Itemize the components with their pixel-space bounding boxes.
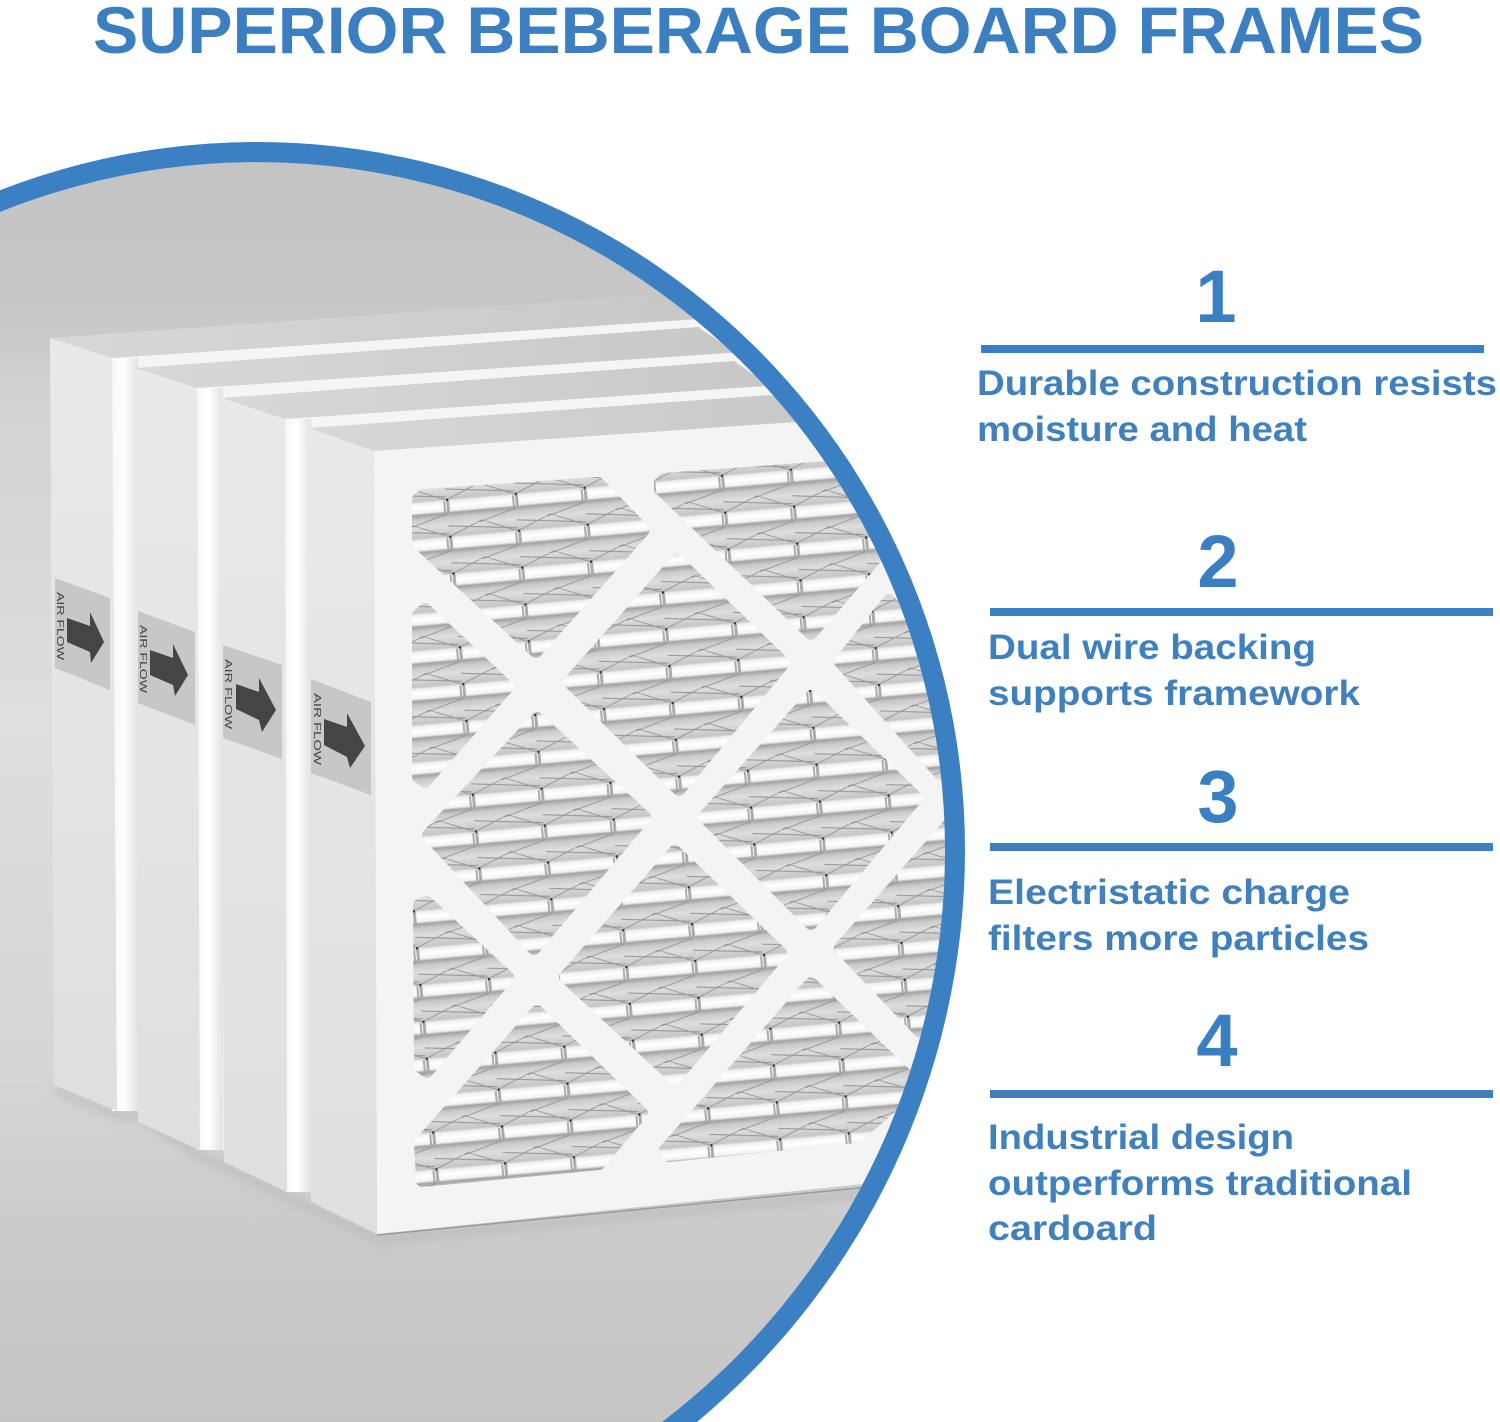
air flow label 1: AIR FLOW — [54, 592, 65, 661]
filter 2 — [135, 327, 800, 1150]
front frame face — [374, 422, 944, 1234]
feature 2 — [988, 520, 1493, 713]
grey studio background — [0, 162, 945, 1422]
feature 1 text: moisture and heat — [977, 410, 1307, 449]
feature 4 text: Industrial design — [988, 1118, 1294, 1157]
air flow label 2: AIR FLOW — [137, 625, 148, 694]
feature 4 — [988, 999, 1493, 1248]
arrow 1 — [67, 612, 104, 663]
panel: product photo circle — [0, 142, 1010, 1422]
feature 4 text — [988, 1118, 1412, 1248]
number 3: 3 — [1197, 755, 1239, 838]
arrow 3 — [236, 678, 276, 732]
filter 4 (front) — [308, 395, 1010, 1235]
number 2: 2 — [1197, 520, 1239, 603]
feature 3 text — [988, 873, 1369, 958]
arrow 4 — [324, 713, 365, 768]
feature 1 text: Durable construction resists — [977, 364, 1497, 403]
feature 2 text — [988, 628, 1361, 713]
feature 3 text: filters more particles — [988, 919, 1369, 958]
feature 1 text — [977, 364, 1497, 449]
number 4: 4 — [1196, 999, 1238, 1082]
feature 4 text: cardoard — [988, 1209, 1157, 1248]
arrow 2 — [150, 644, 188, 696]
air flow label 1 — [54, 578, 110, 690]
air flow label 3: AIR FLOW — [222, 659, 233, 730]
filter 3 — [221, 361, 830, 1192]
feature 3 text: Electristatic charge — [988, 873, 1350, 912]
pleated media openings — [418, 458, 1010, 1181]
feature 2 text: Dual wire backing — [988, 628, 1316, 667]
feature 4 text: outperforms traditional — [988, 1164, 1412, 1203]
blue ring — [0, 142, 965, 1422]
filter 1 (back) — [50, 296, 760, 1111]
feature 3 — [988, 755, 1493, 958]
air flow label 4: AIR FLOW — [311, 693, 322, 766]
air flow label 3 — [222, 645, 282, 759]
feature 1 — [977, 255, 1497, 449]
air flow label 2 — [137, 611, 195, 725]
feature 2 text: supports framework — [988, 674, 1361, 713]
air flow label 4 — [311, 679, 371, 795]
floor shadows under filters — [56, 1090, 880, 1240]
number 1: 1 — [1195, 255, 1237, 338]
